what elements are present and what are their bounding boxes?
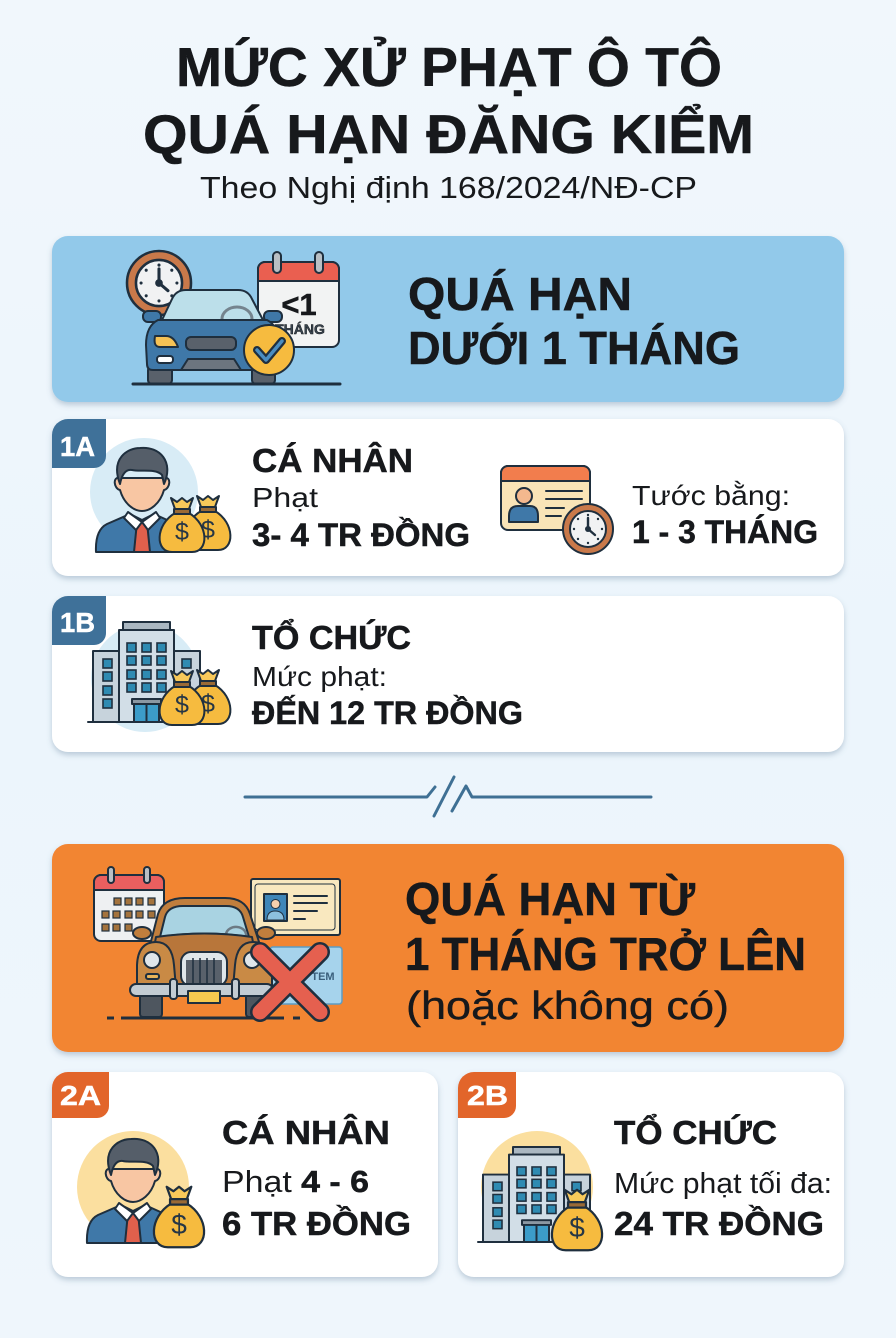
individual fine text: Phạt 4 - 6 [222, 1164, 369, 1199]
individual fine text: 6 TR ĐỒNG [222, 1205, 411, 1242]
badge: 2A: 2A [60, 1080, 101, 1111]
icon: person with money bags [90, 438, 230, 552]
badge: 2B: 2B [467, 1080, 508, 1111]
panel: overdue under 1 month banner [52, 236, 844, 402]
individual fine text [252, 442, 470, 553]
individual fine text: CÁ NHÂN [252, 442, 413, 479]
banner heading [405, 873, 806, 1028]
licence suspension text [632, 480, 818, 550]
badge: 1B [52, 596, 106, 645]
icon: licence card with clock [501, 466, 613, 554]
title [143, 36, 754, 165]
individual fine text: 3- 4 TR ĐỒNG [252, 517, 470, 553]
title: QUÁ HẠN ĐĂNG KIỂM [143, 103, 754, 165]
banner heading [408, 268, 740, 374]
panel: overdue 1 month or more banner [52, 844, 844, 1052]
badge: 2B [458, 1072, 516, 1118]
panel: 1B organisation [52, 596, 844, 752]
organisation fine text: Mức phạt tối đa: [614, 1168, 832, 1200]
organisation fine text: TỔ CHỨC [614, 1114, 777, 1151]
panel: 1A individual [52, 419, 844, 576]
banner heading: QUÁ HẠN TỪ [405, 873, 696, 925]
banner heading: 1 THÁNG TRỞ LÊN [405, 928, 806, 980]
licence suspension text: 1 - 3 THÁNG [632, 514, 818, 550]
panel: 2B organisation [458, 1072, 844, 1277]
organisation fine text: Mức phạt: [252, 661, 387, 692]
icon: calendar, licence and old car with cross [94, 867, 342, 1018]
banner heading: (hoặc không có) [406, 985, 729, 1028]
individual fine text [222, 1114, 411, 1242]
panel: 2A individual [52, 1072, 438, 1277]
icon: clock, calendar and car with check [127, 251, 340, 384]
icon: person with money bag [77, 1131, 204, 1247]
individual fine text: Phạt [252, 482, 318, 513]
subtitle: Theo Nghị định 168/2024/NĐ-CP [200, 170, 697, 205]
banner heading: QUÁ HẠN [408, 268, 632, 320]
badge: 1A [52, 419, 106, 468]
title: MỨC XỬ PHẠT Ô TÔ [176, 36, 722, 98]
badge: 2A [52, 1072, 109, 1118]
licence suspension text: Tước bằng: [632, 480, 790, 511]
icon: building with money bag [478, 1131, 602, 1250]
badge: 1A: 1A [60, 431, 95, 462]
badge: 1B: 1B [60, 607, 95, 638]
icon: calendar, licence and old car with cross: TEM [311, 971, 335, 983]
individual fine text: CÁ NHÂN [222, 1114, 390, 1151]
icon: clock, calendar and car with check: THÁNG [275, 321, 325, 337]
banner heading: DƯỚI 1 THÁNG [408, 322, 740, 374]
icon: clock, calendar and car with check: <1 [281, 287, 317, 322]
organisation fine text: ĐẾN 12 TR ĐỒNG [252, 695, 523, 731]
organisation fine text: 24 TR ĐỒNG [614, 1205, 824, 1242]
organisation fine text [252, 619, 523, 731]
organisation fine text [614, 1114, 832, 1242]
icon: building with money bags [88, 622, 230, 732]
organisation fine text: TỔ CHỨC [252, 619, 411, 656]
